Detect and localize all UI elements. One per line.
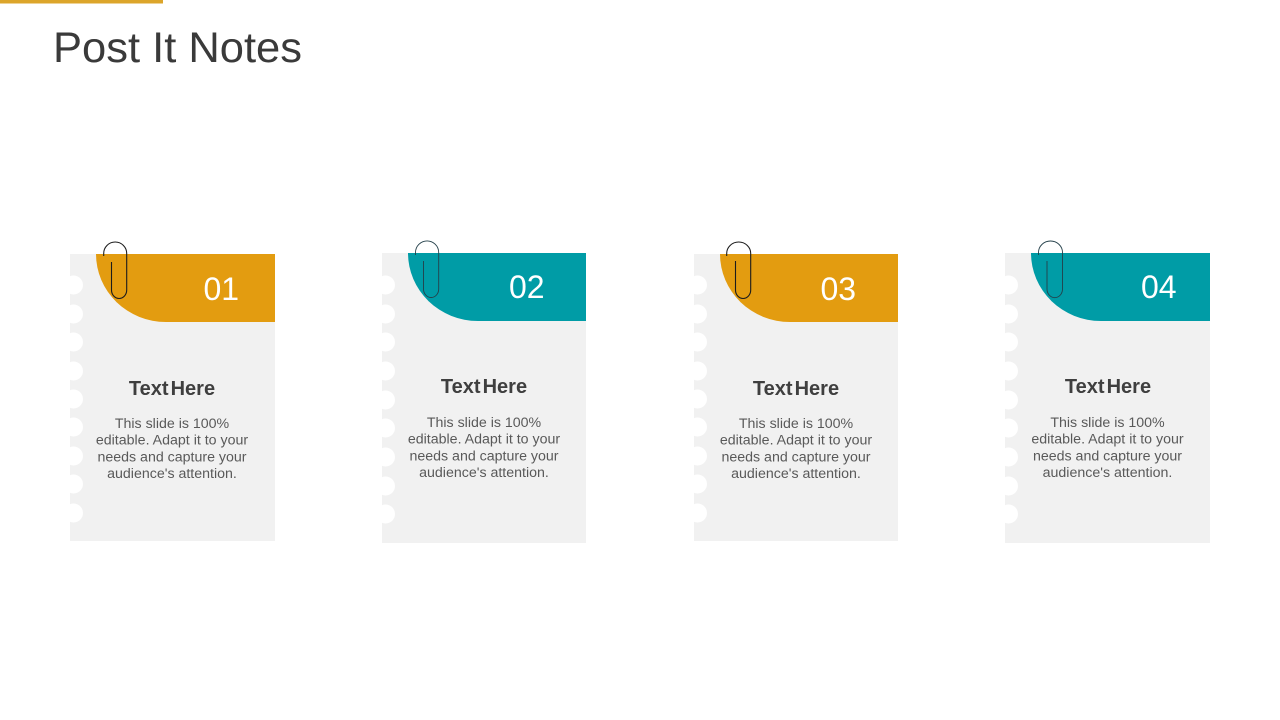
body text: audience's attention. [107, 466, 237, 482]
icon: paper clip [727, 242, 751, 299]
panel: note 01 [64, 242, 275, 541]
heading: Text Here [441, 376, 527, 398]
icon: paper clip [416, 241, 439, 298]
body text: editable. Adapt it to your [1031, 432, 1184, 448]
body text: This slide is 100% [739, 416, 854, 432]
punched holes [688, 276, 707, 522]
body text: needs and capture your [721, 450, 871, 466]
body text: editable. Adapt it to your [408, 432, 560, 448]
paper sheet [382, 253, 586, 543]
panel: note 04 [999, 241, 1210, 543]
body text: needs and capture your [409, 448, 559, 464]
accent bar [0, 0, 163, 4]
icon: paper clip [104, 242, 127, 299]
body text: This slide is 100% [1050, 415, 1165, 431]
body text: audience's attention. [731, 466, 861, 482]
body text: audience's attention. [419, 465, 549, 481]
body text: editable. Adapt it to your [720, 432, 872, 448]
paper sheet [70, 254, 275, 541]
paper sheet [694, 254, 898, 541]
body text: This slide is 100% [427, 415, 542, 431]
title: Post It Notes [53, 24, 302, 72]
panel: note 03 [688, 242, 898, 541]
header band [1031, 253, 1210, 321]
number: 04 [1141, 269, 1177, 305]
header band [720, 254, 898, 322]
body text: needs and capture your [1033, 448, 1182, 464]
body text: This slide is 100% [115, 416, 230, 432]
punched holes [64, 276, 83, 522]
heading: Text Here [1065, 376, 1151, 398]
body text: editable. Adapt it to your [96, 432, 248, 448]
heading: Text Here [753, 378, 839, 400]
header band [408, 253, 586, 321]
number: 01 [204, 271, 239, 307]
header band [96, 254, 275, 322]
heading: Text Here [129, 378, 215, 400]
number: 02 [509, 269, 545, 305]
body text: audience's attention. [1043, 465, 1172, 481]
number: 03 [820, 271, 856, 307]
body text: needs and capture your [97, 450, 247, 466]
punched holes [999, 276, 1018, 524]
icon: paper clip [1038, 241, 1062, 298]
paper sheet [1005, 253, 1210, 543]
panel: note 02 [376, 241, 586, 543]
punched holes [376, 276, 395, 524]
